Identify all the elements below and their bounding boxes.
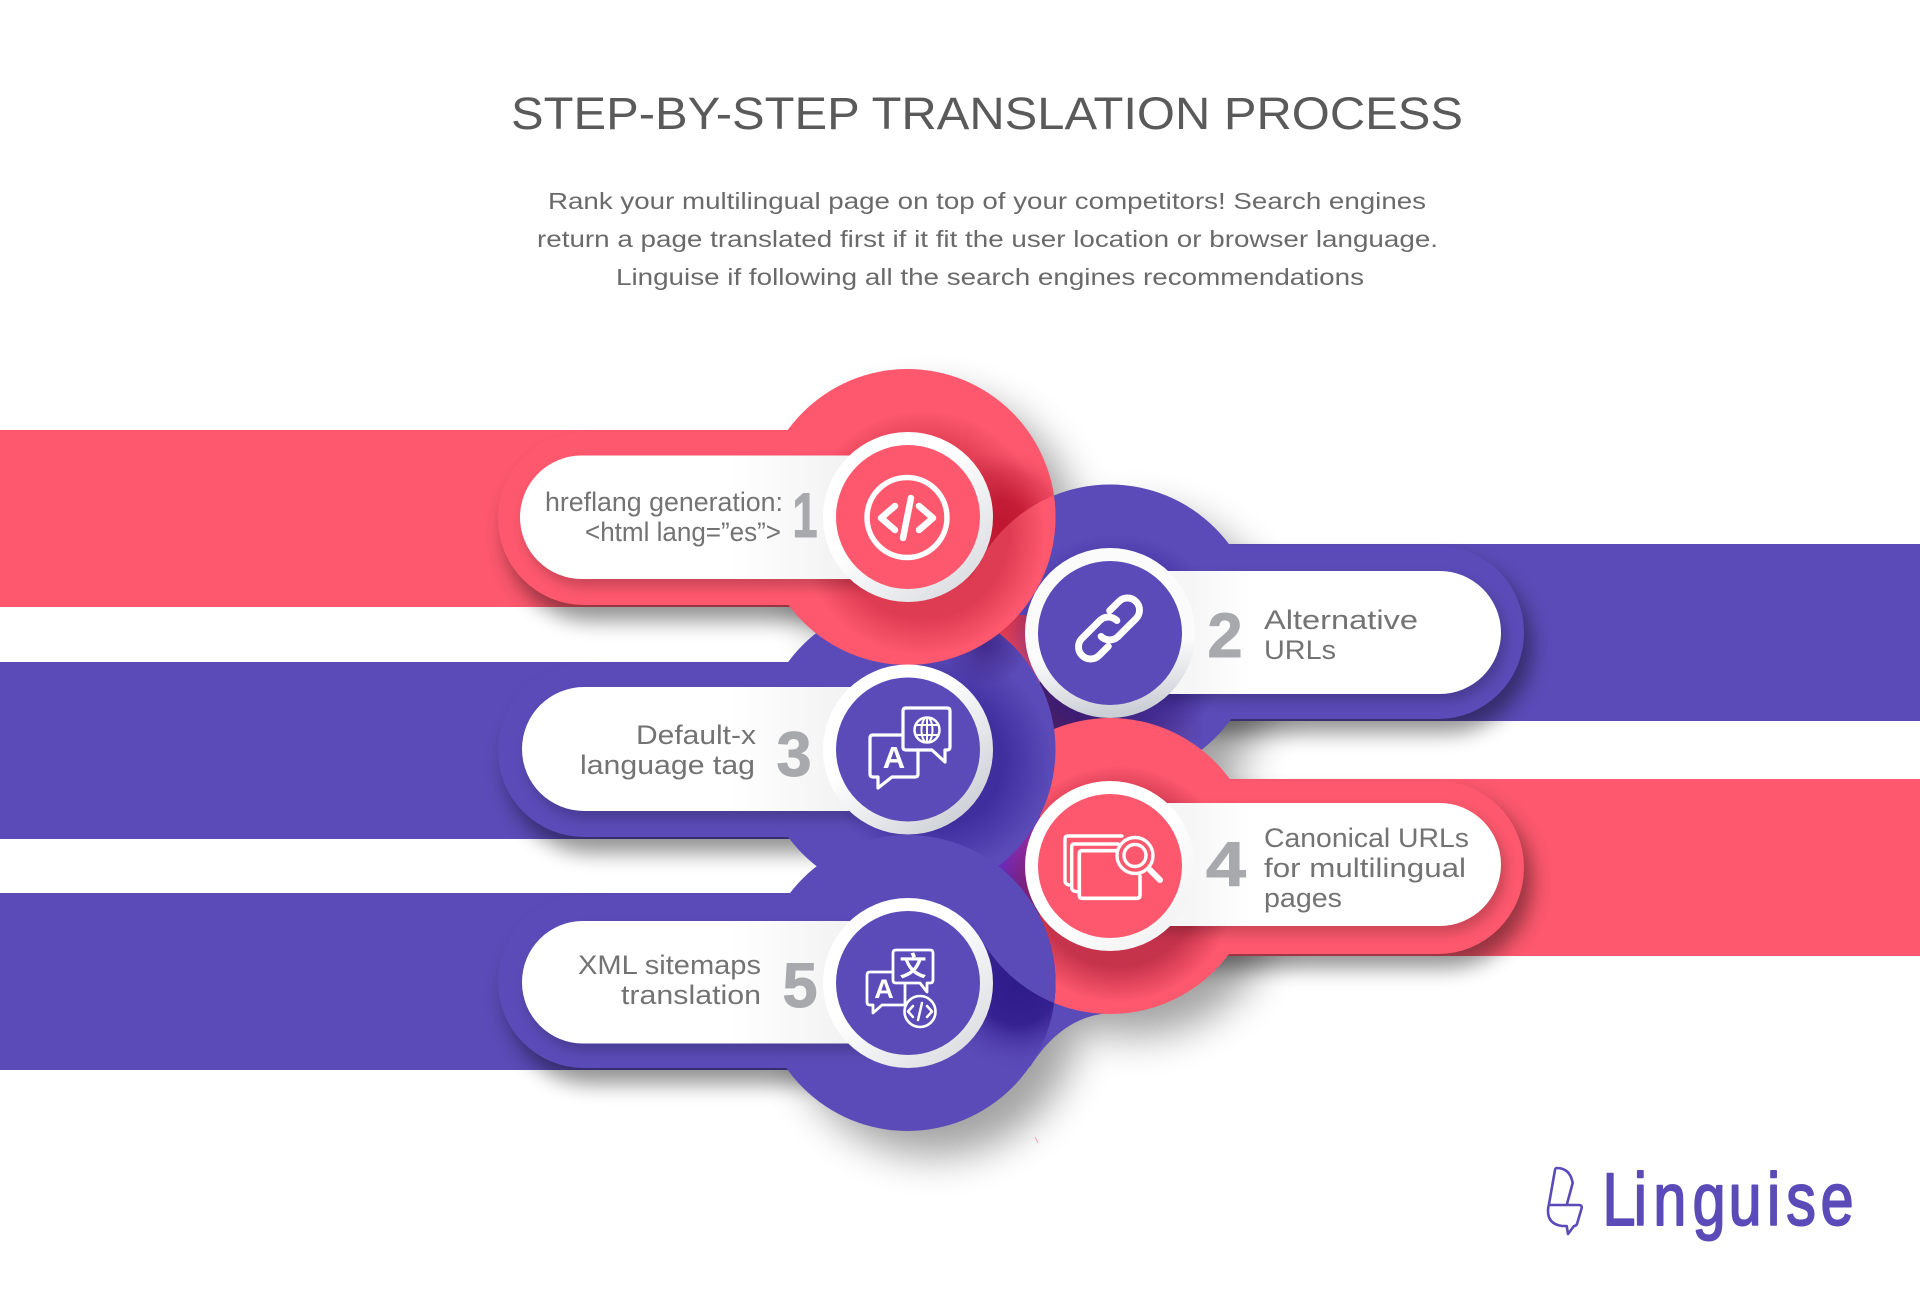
step 4 ring — [1025, 781, 1195, 951]
tiny artifact line — [1035, 1137, 1038, 1143]
step 3 label — [580, 720, 757, 780]
logo — [1548, 1159, 1854, 1242]
band 2 — [1110, 544, 1920, 733]
step 1 label — [545, 487, 783, 547]
intro paragraph — [537, 188, 1438, 290]
step 5 — [522, 898, 993, 1068]
title: STEP-BY-STEP TRANSLATION PROCESS — [511, 88, 1463, 139]
step 5 label: XML sitemaps — [578, 950, 761, 980]
step 1 label: hreflang generation: — [545, 487, 783, 517]
step 2 label: URLs — [1264, 635, 1336, 665]
step 2 ring — [1025, 548, 1195, 718]
step 1 label: <html lang=”es”> — [585, 517, 781, 547]
step 5 number: 5 — [782, 951, 818, 1021]
band 1 — [0, 430, 908, 621]
step 3 number: 3 — [776, 720, 812, 790]
icon: pages with magnifier — [1065, 836, 1160, 898]
icon: translate bubbles with code: A — [874, 974, 894, 1004]
intro paragraph: Linguise if following all the search engines recommendations — [616, 264, 1364, 290]
step 4 pill — [1100, 803, 1506, 933]
intro paragraph: return a page translated first if it fit the user location or browser language. — [537, 226, 1438, 252]
step 4 label: pages — [1264, 883, 1342, 913]
step 5 ring — [823, 898, 993, 1068]
step 1 pill — [520, 456, 924, 587]
ribbon artwork: bands and overlapping circles — [0, 369, 1920, 1156]
step 2 number: 2 — [1207, 601, 1243, 671]
logo wordmark: Linguise — [1603, 1159, 1854, 1242]
band 3 — [0, 662, 908, 853]
step 2 label: Alternative — [1264, 605, 1418, 635]
step 1 ring — [823, 432, 993, 602]
intro paragraph: Rank your multilingual page on top of your competitors! Search engines — [548, 188, 1426, 214]
circle 4 — [998, 718, 1230, 1014]
icon: code in circle — [867, 478, 947, 558]
circle 2 — [999, 484, 1231, 750]
circle 1 — [788, 369, 1056, 665]
icon: translate bubbles with code: 文 — [900, 952, 926, 982]
step 4 number: 4 — [1206, 830, 1246, 900]
circle 5 — [786, 835, 1056, 1131]
step 4 label: Canonical URLs — [1264, 823, 1469, 853]
step 3 — [522, 664, 993, 834]
step 1 — [520, 432, 993, 602]
icon: language bubbles with globe: A — [883, 740, 905, 775]
icon: chain link — [1073, 593, 1145, 664]
band 5 — [0, 893, 908, 1084]
step 2 pill — [1100, 571, 1506, 701]
step 3 label: Default-x — [636, 720, 757, 750]
step 4 label — [1264, 823, 1469, 913]
step 3 pill — [522, 687, 926, 819]
icon: language bubbles with globe — [870, 708, 950, 788]
step 4 label: for multilingual — [1264, 853, 1466, 883]
step 2 label — [1264, 605, 1418, 665]
circle 3 — [788, 633, 1056, 866]
step 1 number: 1 — [792, 480, 818, 551]
band 4 — [1110, 779, 1920, 968]
purple fillet under step 4 circle — [990, 980, 1110, 1067]
step 5 label: translation — [621, 980, 761, 1010]
step 5 label — [578, 950, 761, 1010]
step 5 pill — [522, 921, 926, 1051]
step 4 — [1025, 781, 1506, 951]
icon: logo pen — [1548, 1168, 1582, 1234]
step 3 label: language tag — [580, 750, 755, 780]
icon: translate bubbles with code — [867, 950, 936, 1027]
step 3 ring — [823, 664, 993, 834]
step 2 — [1025, 548, 1506, 718]
